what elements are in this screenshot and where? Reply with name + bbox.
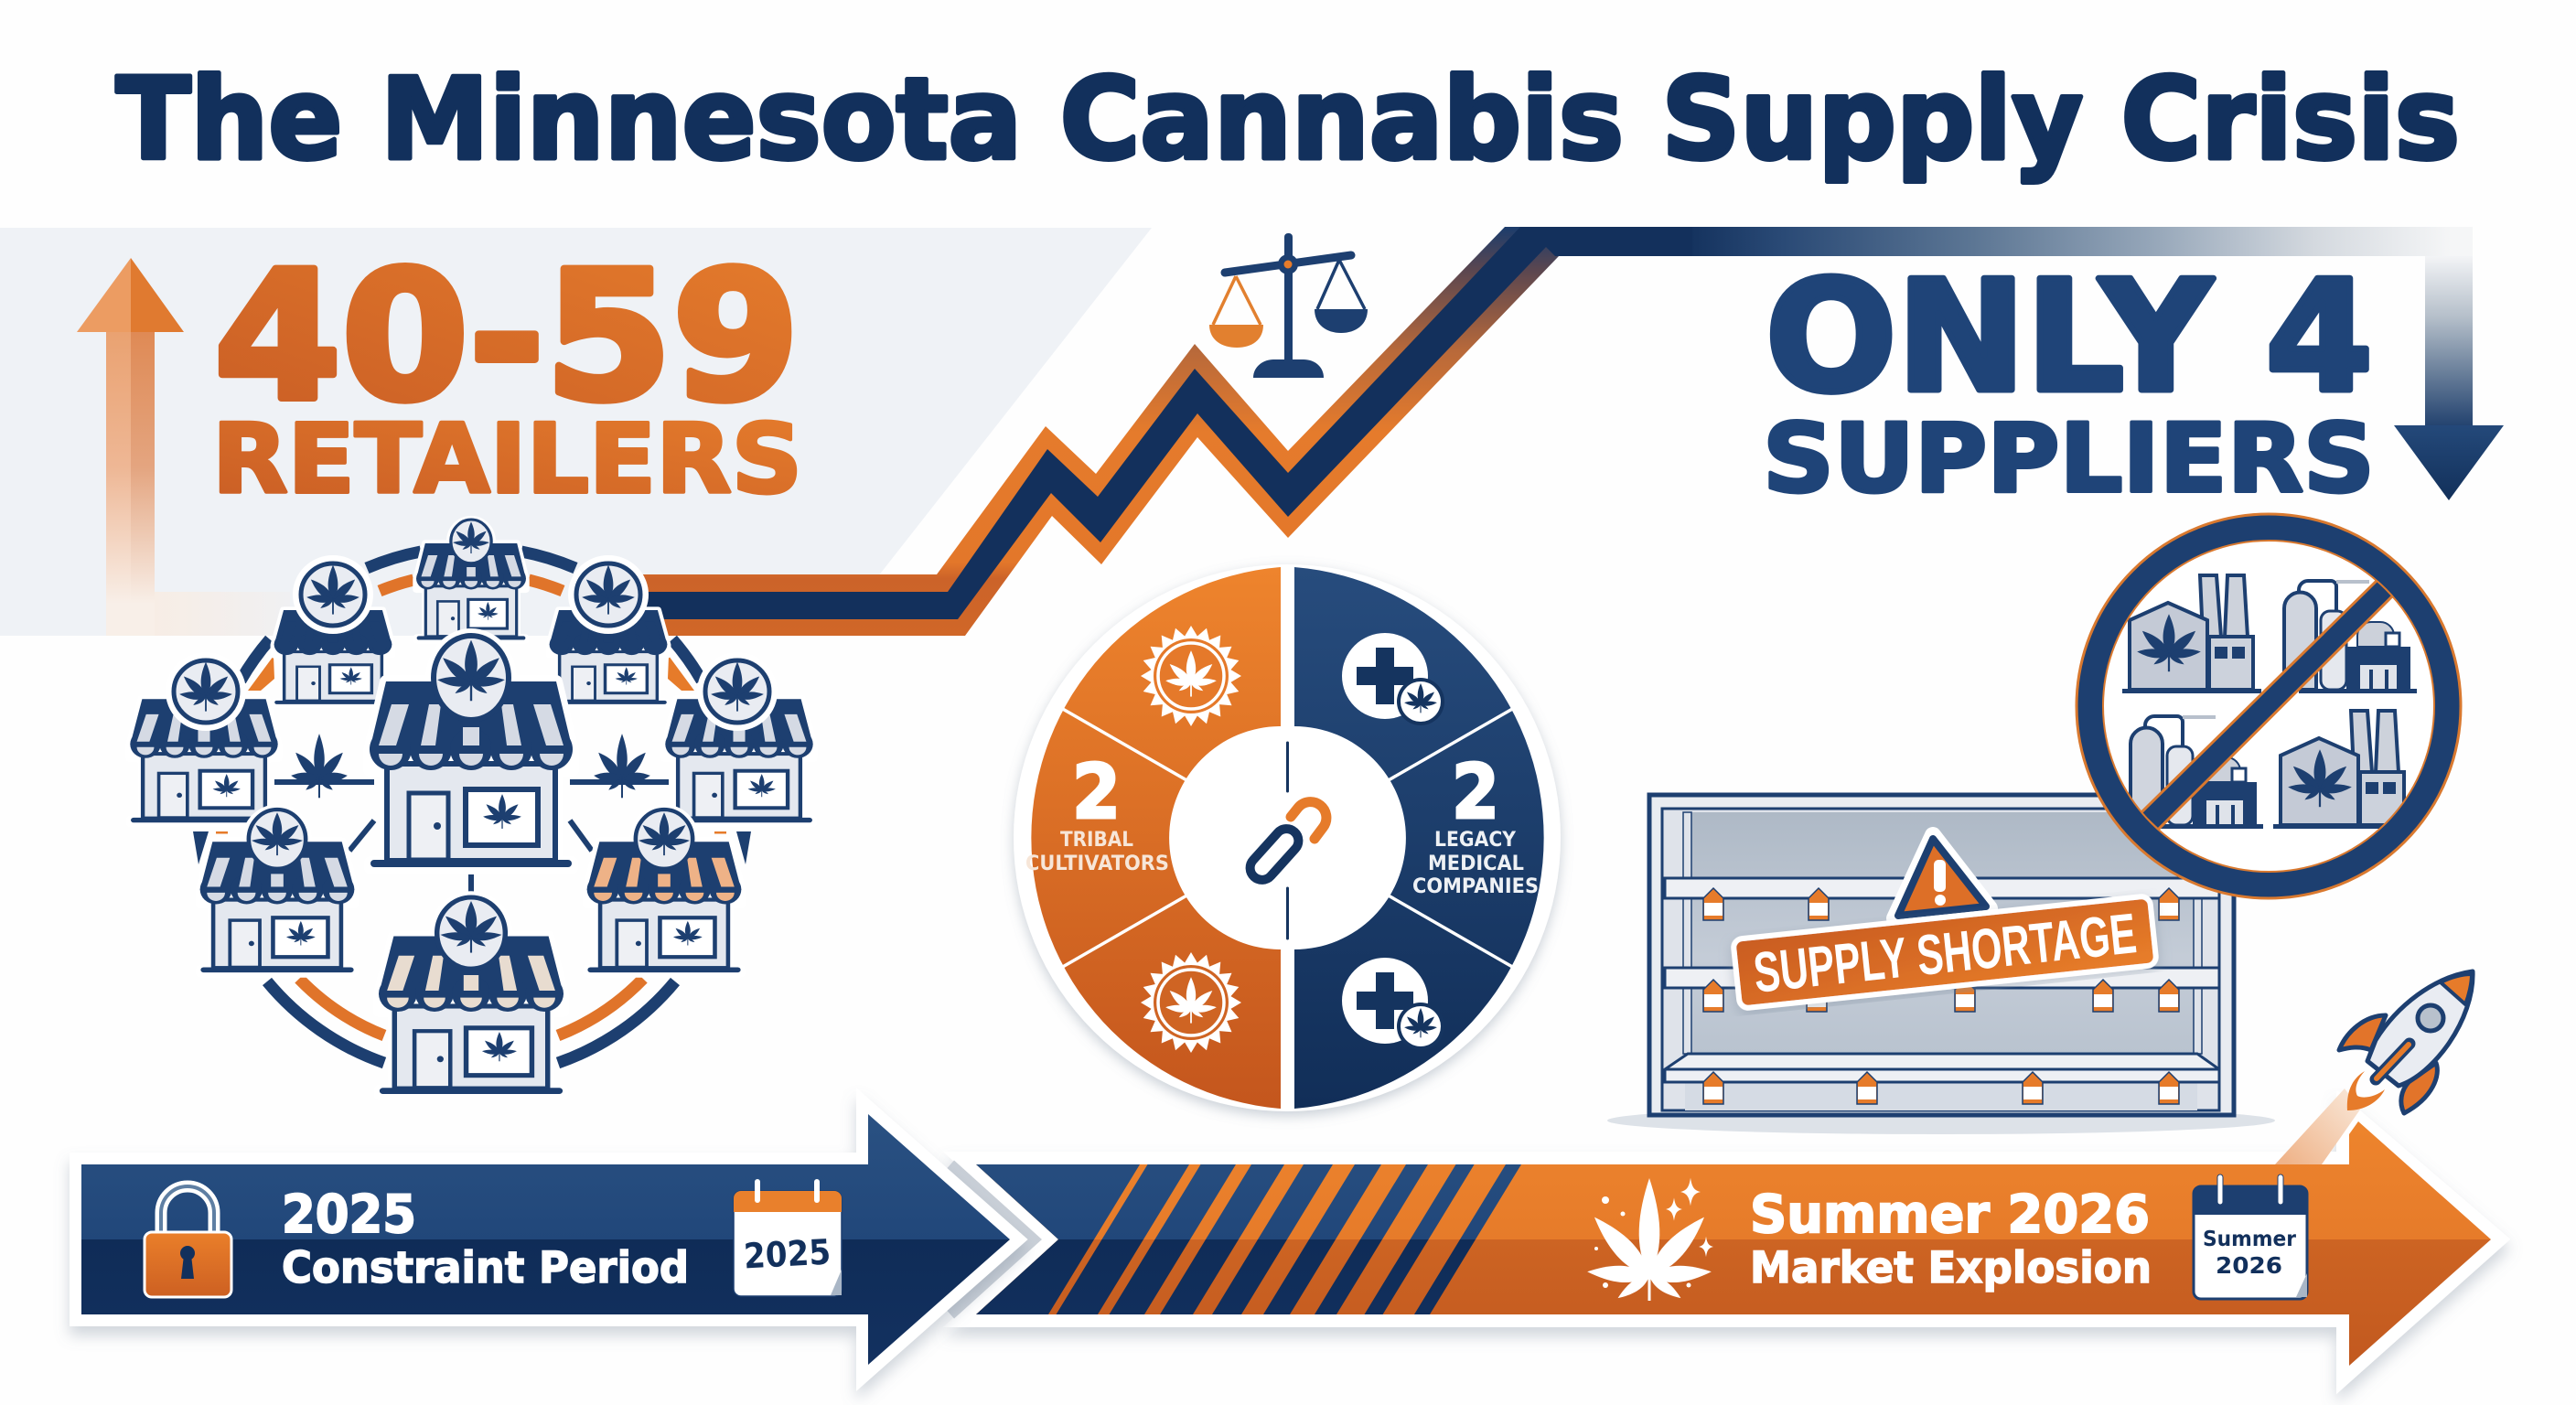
arrow: summer 2026 market explosion <box>976 1121 2491 1366</box>
refinery bottom left <box>2131 716 2263 829</box>
diagonal stripes <box>1048 1164 1506 1314</box>
store: top <box>416 519 526 640</box>
icon: rocket with trail <box>2275 971 2473 1164</box>
arrow: line fading into down arrow <box>1692 227 2504 500</box>
connector lines <box>274 782 669 901</box>
shelf boards <box>1665 878 2219 1082</box>
arrow: up arrow behind retailers <box>77 258 290 636</box>
segment: tribal half <box>1031 567 1281 1109</box>
store: upper left <box>274 586 392 704</box>
label: tribal cultivators <box>1025 749 1169 875</box>
banner: supply shortage <box>1733 896 2157 1009</box>
stat: only 4 suppliers: ONLY 4 <box>1766 249 2373 426</box>
chart line: zigzag supply trend <box>585 227 1701 636</box>
store: left <box>130 668 278 823</box>
stat: 40-59 retailers: 40-59 <box>214 233 800 440</box>
icon: warning triangle <box>1894 835 1990 918</box>
label: legacy medical companies: COMPANIES <box>1412 875 1539 898</box>
icon: tribal sun bottom <box>1141 952 1241 1053</box>
label: 2025: 2025 <box>282 1185 416 1245</box>
label: summer 2026: Summer 2026 <box>1750 1185 2150 1245</box>
illustration: empty shelf <box>1607 795 2275 1134</box>
store: lower left <box>200 809 354 973</box>
icon: tribal sun top <box>1141 626 1241 726</box>
ring of arcs <box>241 552 702 1063</box>
icon: leaf right <box>594 734 650 798</box>
label: legacy medical companies <box>1412 749 1539 898</box>
icon: prohibited factories <box>2077 514 2461 898</box>
stat: only 4 suppliers: SUPPLIERS <box>1763 404 2375 514</box>
icon: padlock <box>145 1186 231 1297</box>
label: constraint period: Constraint Period <box>282 1243 689 1293</box>
sign: upper left store <box>298 561 368 628</box>
price tags row 2 <box>1703 980 2179 1012</box>
icon: calendar summer 2026 <box>2194 1174 2307 1299</box>
stat: 40-59 retailers: RETAILERS <box>212 403 802 515</box>
icon: calendar 2025 <box>734 1179 842 1296</box>
label: legacy medical companies: 2 <box>1452 749 1499 836</box>
sign: left store <box>171 658 241 725</box>
segment: legacy medical half <box>1294 567 1544 1109</box>
icon: sparkling leaf <box>1587 1178 1713 1303</box>
label: tribal cultivators: 2 <box>1072 749 1121 836</box>
icon: chain link <box>1245 743 1326 938</box>
icon: calendar 2025: 2025 <box>743 1232 832 1276</box>
icon: medical cross top <box>1342 633 1444 725</box>
banner: supply shortage: SUPPLY SHORTAGE <box>1751 902 2140 1005</box>
arrow: 2025 constraint period <box>81 1114 2491 1366</box>
icon: medical cross bottom <box>1342 958 1444 1050</box>
sign: upper right store <box>574 561 643 628</box>
store: upper right <box>550 586 667 704</box>
label: market explosion: Market Explosion <box>1750 1243 2152 1293</box>
factory bottom right <box>2273 711 2412 829</box>
label: tribal cultivators: CULTIVATORS <box>1025 853 1169 875</box>
label: legacy medical companies: MEDICAL <box>1428 853 1524 875</box>
label: legacy medical companies: LEGACY <box>1434 829 1517 852</box>
panel: retailers background <box>0 228 1152 636</box>
icon: leaf left <box>291 734 348 798</box>
store: lower right <box>587 809 741 973</box>
stat: only 4 suppliers <box>1763 249 2375 514</box>
price tags row 1 <box>1703 888 2179 920</box>
icon: calendar summer 2026: 2026 <box>2216 1252 2282 1279</box>
title: The Minnesota Cannabis Supply Crisis <box>116 55 2460 186</box>
icon: scales of justice <box>1209 233 1368 378</box>
chart: supplier donut <box>1014 564 1561 1111</box>
store: right <box>665 668 813 823</box>
refinery top right <box>2284 581 2417 693</box>
label: tribal cultivators: TRIBAL <box>1060 829 1133 852</box>
panel: retailer network <box>130 519 813 1095</box>
factory top left <box>2122 575 2261 693</box>
icon: calendar summer 2026: Summer <box>2203 1228 2297 1251</box>
sign: right store <box>703 658 772 725</box>
store: bottom <box>379 896 564 1095</box>
price tags row 3 <box>1703 1072 2179 1104</box>
store: centre <box>370 635 573 868</box>
